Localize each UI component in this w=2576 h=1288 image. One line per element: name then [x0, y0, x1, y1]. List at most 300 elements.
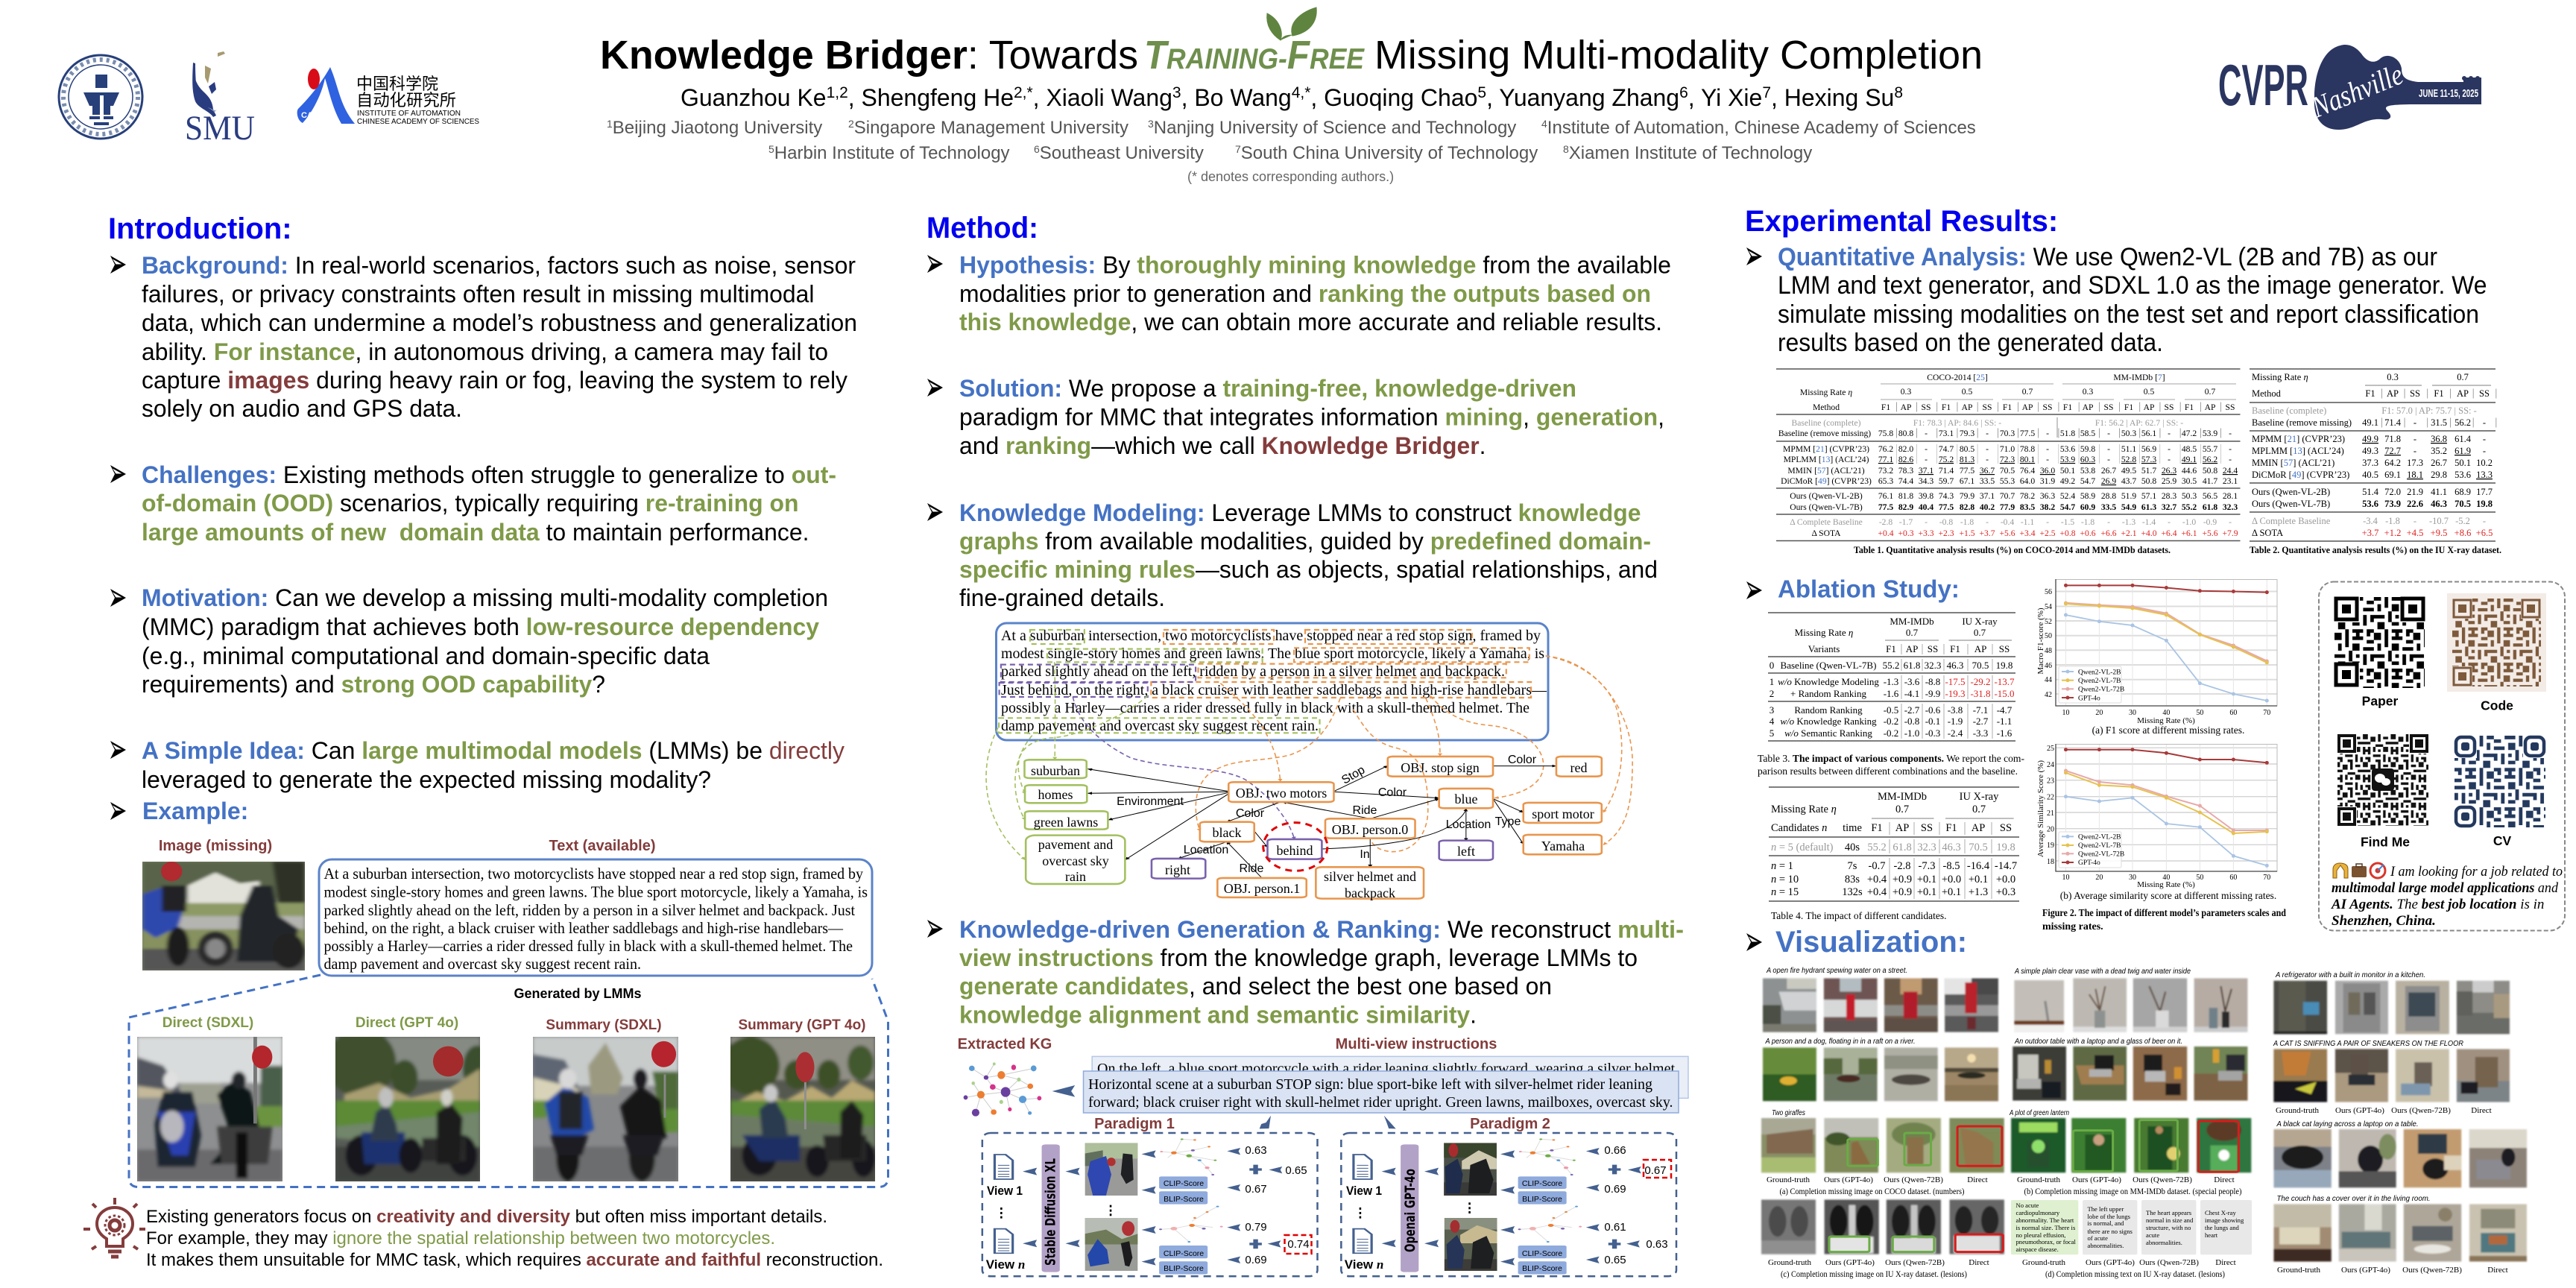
chart legend a: Qwen2-VL-2B	[2078, 669, 2121, 677]
table 4: -14.7	[1995, 860, 2017, 872]
table 1: Ours (Qwen-VL-7B)	[1790, 502, 1863, 512]
table 3: AP	[1906, 643, 1918, 654]
table 2: 56.2	[2455, 417, 2471, 428]
table 1: -	[1925, 444, 1928, 454]
authors: 4,*	[1292, 84, 1310, 101]
generated report text: structure, with no	[2146, 1224, 2191, 1231]
table 1: -0.4	[2001, 517, 2014, 527]
table 1: 57.1	[2141, 491, 2156, 501]
table 1: -	[2107, 444, 2110, 454]
table 3: -2.7	[1904, 704, 1920, 716]
table 2: 50.1	[2455, 458, 2471, 468]
bullet: Challenges	[110, 461, 836, 546]
graph node labels: pavement and	[1038, 837, 1113, 852]
job note: Shenzhen, China.	[2332, 913, 2436, 929]
chart: similarity score: 19	[2047, 842, 2054, 850]
table 2: 51.4	[2362, 487, 2379, 497]
visualization column labels: Ours (GPT-4o)	[2335, 1106, 2384, 1115]
table 1: AP	[1962, 402, 1972, 412]
table 1: 40.4	[1919, 502, 1933, 512]
table 1: 26.9	[2101, 476, 2116, 486]
table 1: MPMM [21] (CVPR’23)	[1783, 444, 1869, 454]
logo: CVPR Nashville: Nashville	[2306, 57, 2408, 124]
affiliations: 8	[1563, 143, 1569, 155]
visualization prompts	[1765, 967, 2463, 1203]
arrow: KG to instructions	[1052, 1085, 1075, 1097]
table 1: 49.1	[2182, 455, 2197, 464]
table 2: 37.3	[2362, 458, 2378, 468]
authors: 7	[1762, 84, 1771, 101]
graph node labels: OBJ. person.0	[1332, 822, 1408, 837]
table 1: 30.5	[2182, 476, 2197, 486]
table 1: 0.5	[1962, 387, 1972, 397]
table 1: MMIN [57] (ACL’21)	[1787, 466, 1865, 476]
bullet: Knowledge Modeling: fine-grained details.	[959, 584, 1165, 611]
logo: CASIA: 中国科学院	[356, 71, 438, 95]
bullet: Motivation	[110, 584, 828, 698]
visualization column labels: Ground-truth	[2017, 1175, 2061, 1184]
heading: Introduction: Introduction:	[108, 212, 292, 245]
bullet: A Simple Idea: leveraged to generate the expected missing modality?	[142, 766, 711, 793]
chart legend b: Qwen2-VL-72B	[2078, 851, 2124, 859]
table 1: 71.4	[1939, 466, 1954, 476]
chart: similarity score: 22	[2047, 793, 2054, 802]
bullet: Background: Background: In real-world scenarios, factors such as noise, sensor	[142, 252, 856, 279]
takeaway text: It makes them unsuitable for MMC task, which requires accurate and faithful reconstruction.	[146, 1250, 883, 1270]
table 3: Variants	[1808, 643, 1840, 654]
table 4: n = 10	[1771, 874, 1799, 886]
table 3: 0.7	[1906, 627, 1919, 638]
table 4	[1769, 787, 2019, 921]
table 1: +6.1	[2181, 528, 2197, 538]
affiliations: Nanjing University of Science and Technology	[1154, 118, 1516, 138]
graph edge labels	[1117, 754, 1537, 875]
title: Knowledge Bridger: Towards	[600, 34, 1138, 78]
callout: source text	[319, 859, 872, 976]
generated report text: Chest X-ray	[2205, 1209, 2236, 1216]
paradigm labels and scores: CLIP-Score	[1164, 1179, 1204, 1188]
table 1: 44.6	[2182, 466, 2197, 476]
authors: Guanzhou Ke	[681, 84, 827, 111]
affiliations: 3	[1148, 118, 1154, 130]
bullet: A Simple Idea	[110, 737, 845, 793]
table 4: AP	[1895, 822, 1909, 834]
table 3: -8.8	[1925, 676, 1940, 687]
table 1: 56.1	[2141, 429, 2156, 438]
chart: F1 score: Missing Rate (%)	[2137, 716, 2195, 725]
table 2: -	[2483, 446, 2486, 456]
table 1: 80.5	[1960, 444, 1974, 454]
table 1: 34.3	[1919, 476, 1933, 486]
table 2: 13.3	[2476, 470, 2493, 480]
table 1: F1: 56.2 | AP: 62.7 | SS: -	[2095, 418, 2183, 428]
chart legend b: Qwen2-VL-2B	[2078, 833, 2121, 841]
bullet: Challenges: of-domain (OOD) scenarios, typically requiring re-training on	[142, 490, 799, 517]
table 1: AP	[2205, 402, 2215, 412]
table 1: 72.3	[2000, 455, 2015, 464]
table 1: 78.3	[1898, 466, 1913, 476]
generated report text: cardiopulmonary	[2015, 1209, 2060, 1216]
chart: F1 score: 60	[2229, 709, 2237, 717]
pipeline shapes and images	[964, 1056, 1688, 1117]
paradigm generated images	[1085, 1143, 1497, 1271]
authors: , Yuanyang Zhang	[1486, 84, 1679, 111]
table 1: 77.5	[1878, 502, 1893, 512]
graph node labels: blue	[1455, 792, 1478, 806]
table 2: 26.7	[2431, 458, 2447, 468]
paradigm labels and scores: BLIP-Score	[1164, 1195, 1204, 1204]
bullet: Knowledge Modeling: Knowledge Modeling: Leverage LMMs to construct knowledge	[959, 499, 1641, 526]
table 1: -	[2229, 455, 2232, 464]
table 2: 71.4	[2384, 417, 2402, 428]
table 2	[2250, 369, 2501, 555]
table 2: -10.7	[2429, 516, 2449, 526]
table 1: AP	[2022, 402, 2033, 412]
chart: similarity score: 25	[2047, 745, 2054, 753]
table 2: 64.2	[2384, 458, 2401, 468]
table 2: 36.8	[2431, 434, 2447, 444]
table 3: 61.8	[1904, 660, 1920, 671]
visualization column labels: Direct	[2471, 1106, 2492, 1115]
bullet: Hypothesis: Hypothesis: By thoroughly mining knowledge from the available	[959, 252, 1671, 279]
chart: similarity score: Missing Rate (%)	[2137, 880, 2195, 889]
table 4: time	[1843, 822, 1862, 834]
table 4: -2.8	[1894, 860, 1910, 872]
table 1: 81.3	[1960, 455, 1974, 464]
table 3: AP	[1974, 643, 1986, 654]
bullet: Motivation: (e.g., minimal computational and domain-specific data	[142, 643, 710, 669]
generated report text: image showing	[2205, 1216, 2244, 1224]
table 1: -	[2229, 444, 2232, 454]
table 3: -0.2	[1884, 716, 1898, 727]
table 4: 7s	[1848, 860, 1857, 872]
table 1: 37.1	[1919, 466, 1933, 476]
bullet: Knowledge Modeling: specific mining rules—such as objects, spatial relationships, and	[959, 556, 1658, 583]
table 2: 19.8	[2476, 499, 2493, 509]
chart: F1 score: 42	[2045, 691, 2052, 699]
bullet: Knowledge-driven Generation and Ranking: view instructions from the knowledge graph, leverage LMMs to	[959, 944, 1638, 971]
table 3: 0.7	[1974, 627, 1986, 638]
bullet: Motivation: requirements) and strong OOD capability?	[142, 671, 605, 698]
generated report text: abnormality. The heart	[2015, 1216, 2074, 1224]
table 1: 60.9	[2080, 502, 2095, 512]
header	[59, 7, 2481, 184]
table 1: 43.7	[2121, 476, 2136, 486]
graph node labels: behind	[1276, 843, 1313, 858]
visualization column labels: Ours (GPT-4o)	[2072, 1175, 2121, 1184]
affiliations: Southeast University	[1040, 143, 1204, 163]
table 2: Δ Complete Baseline	[2252, 516, 2331, 526]
generated report text: of acute	[2087, 1234, 2108, 1242]
table 4: +0.1	[1969, 874, 1988, 886]
table 1: SS	[2043, 402, 2052, 412]
table 4: n = 5 (default)	[1771, 842, 1834, 853]
table 4: +0.4	[1867, 886, 1887, 898]
table 1: 28.1	[2223, 491, 2238, 501]
table 2: MMIN [57] (ACL’21)	[2252, 458, 2334, 468]
authors: 5	[1477, 84, 1486, 101]
table 2: 72.0	[2384, 487, 2401, 497]
table 3: -1.6	[1997, 727, 2012, 739]
table 2: -	[2414, 516, 2416, 526]
front instruction box	[1084, 1071, 1679, 1113]
graph edge labels: Color	[1378, 786, 1407, 799]
arrows to paradigms	[1260, 1116, 1396, 1128]
graph edge labels: In	[1360, 848, 1370, 861]
table 3: 70.5	[1972, 660, 1989, 671]
table 1: 26.7	[2101, 466, 2116, 476]
table 1: 83.5	[2020, 502, 2035, 512]
visualization column labels: Direct	[2487, 1266, 2508, 1275]
table 2: 49.3	[2362, 446, 2378, 456]
table 1: 40.2	[1980, 502, 1995, 512]
table 2: 53.6	[2362, 499, 2378, 509]
table 2: 0.3	[2387, 372, 2399, 382]
visualization column labels: Ground-truth	[2022, 1258, 2066, 1267]
table 2: Missing Rate η	[2252, 372, 2308, 382]
table 2: -3.4	[2363, 516, 2378, 526]
table 1: F1	[1881, 402, 1890, 412]
QR code: paper	[2334, 597, 2425, 688]
label: Code: Code	[2481, 698, 2513, 713]
chart legend b: GPT-4o	[2078, 859, 2100, 867]
chart: F1 score: 54	[2045, 603, 2052, 611]
table 3: -0.3	[1925, 727, 1940, 739]
table 1: F1	[2185, 402, 2194, 412]
table 3: -17.5	[1945, 676, 1966, 687]
table 2: Ours (Qwen-VL-7B)	[2252, 499, 2330, 509]
table 2: Ours (Qwen-VL-2B)	[2252, 487, 2330, 497]
chart: F1 score: 40	[2162, 709, 2170, 717]
visualization column labels: Ground-truth	[2276, 1106, 2320, 1115]
label: summary SDXL: Summary (SDXL)	[546, 1017, 662, 1033]
authors: 8	[1894, 84, 1903, 101]
table 4: 132s	[1842, 886, 1863, 898]
table 1: F1	[1942, 402, 1951, 412]
table 2 caption: Table 2. Quantitative analysis results (%) on the IU X-ray dataset.	[2250, 545, 2501, 555]
table 1: -1.3	[2122, 517, 2135, 527]
row: fridge	[2273, 981, 2510, 1034]
source text box: Just behind, on the right, a black cruiser with leather saddlebags and high-rise handlebars—	[1001, 682, 1547, 698]
bullet: Hypothesis: modalities prior to generation and ranking the outputs based on	[959, 280, 1651, 307]
table 1: 28.8	[2101, 491, 2116, 501]
panel: method	[926, 212, 1688, 1276]
heading: Method: Method:	[926, 212, 1038, 244]
bullet: Quantitative Analysis: simulate missing modalities on the test set and report classification	[1778, 300, 2479, 329]
authors: 6	[1679, 84, 1688, 101]
table 3: -4.1	[1904, 688, 1919, 699]
table 2: 35.2	[2431, 446, 2447, 456]
table 4: 83s	[1845, 874, 1860, 886]
visualization column labels: Ours (GPT-4o)	[1825, 1258, 1875, 1267]
score boxes	[1159, 1176, 1208, 1275]
table 1: SS	[1922, 402, 1931, 412]
table 2: SS	[2410, 388, 2420, 399]
table 2: 68.9	[2455, 487, 2471, 497]
visualization column labels: Ours (Qwen-72B)	[1885, 1258, 1945, 1267]
table 1: AP	[1901, 402, 1911, 412]
table 2: 41.1	[2431, 487, 2447, 497]
table 4: AP	[1972, 822, 1985, 834]
table 1: 33.5	[2101, 502, 2116, 512]
table 1: -1.0	[2182, 517, 2196, 527]
affiliations: Singapore Management University	[854, 118, 1128, 138]
graph node labels: green lawns	[1034, 815, 1098, 830]
row: sneakers cat	[2273, 1049, 2510, 1102]
table 1: 74.3	[1939, 491, 1954, 501]
table 3: -2.4	[1948, 727, 1963, 739]
table 1: 59.7	[1939, 476, 1954, 486]
table 1: 50.1	[2060, 466, 2075, 476]
table 3: Random Ranking	[1794, 704, 1863, 716]
bullet: Knowledge-driven Generation and Ranking: generate candidates, and select the best one based on	[959, 973, 1552, 1000]
mini graphs	[1159, 1138, 1223, 1243]
table 1: 82.9	[1898, 502, 1913, 512]
table 1: 79.3	[1960, 429, 1974, 438]
table 3 caption	[1758, 753, 2025, 777]
generated report text: acute	[2146, 1231, 2159, 1239]
visualization column labels: Ours (Qwen-72B)	[2402, 1266, 2462, 1275]
logo: Singapore Management University	[185, 51, 255, 148]
table 2: 49.9	[2362, 434, 2378, 444]
table 1: 76.4	[2020, 466, 2035, 476]
authors: , Bo Wang	[1181, 84, 1292, 111]
table 1: 33.5	[1980, 476, 1995, 486]
table 1: 49.2	[2060, 476, 2075, 486]
generated report text: there are no signs	[2087, 1228, 2133, 1235]
bullet: Knowledge-driven Generation and Ranking	[927, 916, 1684, 1029]
generated report text: no pleural effusion,	[2015, 1231, 2065, 1239]
table 2: +6.5	[2476, 528, 2493, 538]
table 1: 26.3	[2162, 466, 2176, 476]
table 2: MPLMM [13] (ACL’24)	[2252, 446, 2344, 456]
table 3: -1.6	[1884, 688, 1899, 699]
paradigm labels and scores: BLIP-Score	[1522, 1195, 1562, 1204]
graph edge labels: Environment	[1117, 795, 1184, 808]
icon: light bulb	[83, 1198, 145, 1257]
authors: 3	[1172, 84, 1181, 101]
table 3: 46.3	[1947, 660, 1963, 671]
image: summary SDXL	[533, 1037, 678, 1181]
table 1: 51.9	[2121, 491, 2136, 501]
table 3: 0	[1770, 660, 1774, 671]
chart: F1 score: 10	[2062, 709, 2069, 717]
bullet: Background: data, which can undermine a model’s robustness and generalization	[142, 309, 857, 336]
visualization column labels: Ours (Qwen-72B)	[1884, 1175, 1943, 1184]
table 1: -	[2229, 429, 2232, 438]
bullet: Background: solely on audio and GPS data.	[142, 395, 462, 422]
bullet: Quantitative Analysis: Quantitative Analysis: We use Qwen2-VL (2B and 7B) as our	[1778, 243, 2437, 271]
graph node labels	[1031, 760, 1594, 900]
row: x-ray	[1761, 1199, 2004, 1254]
authors: , Shengfeng He	[848, 84, 1014, 111]
row: laptop	[2012, 1046, 2247, 1101]
generated report text: is normal, and	[2087, 1219, 2124, 1227]
bullet: Background: capture images during heavy rain or fog, leaving the system to rely	[142, 367, 847, 394]
table 2: -	[2414, 434, 2416, 444]
table 1: 53.9	[2060, 455, 2075, 464]
paradigm labels and scores: 0.65	[1285, 1164, 1307, 1177]
table 2: 18.1	[2407, 470, 2423, 480]
bullet: Solution: and ranking—which we call Knowledge Bridger.	[959, 432, 1486, 459]
table 1: 55.7	[2203, 444, 2217, 454]
label: Paradigm 2: Paradigm 2	[1470, 1116, 1550, 1132]
table 1: 24.4	[2223, 466, 2238, 476]
logo: CASIA: INSTITUTE OF AUTOMATION	[357, 110, 461, 118]
figure 2 caption	[2042, 908, 2286, 932]
visualization column labels: Direct	[1967, 1175, 1988, 1184]
table 1: -	[1925, 517, 1928, 527]
table 1: 80.1	[2020, 455, 2035, 464]
table 3: SS	[1928, 643, 1938, 654]
table 2: 0.7	[2457, 372, 2469, 382]
chart: similarity score: 21	[2047, 809, 2054, 818]
table 3: 2	[1770, 688, 1774, 699]
table 2: 71.8	[2384, 434, 2401, 444]
table 1 caption: Table 1. Quantitative analysis results (%) on COCO-2014 and MM-IMDb datasets.	[1854, 545, 2171, 555]
table 4: +0.9	[1892, 874, 1912, 886]
table 4: Missing Rate η	[1771, 804, 1837, 815]
bullet: Ablation Study: Ablation Study:	[1778, 575, 1960, 602]
table 4: 32.3	[1917, 842, 1936, 853]
table 3: 5	[1770, 727, 1774, 739]
table 1: MPLMM [13] (ACL’24)	[1784, 455, 1869, 464]
table 1: Baseline (complete)	[1791, 418, 1861, 428]
table 1: -	[1925, 455, 1928, 464]
table 4: +0.4	[1867, 874, 1887, 886]
table 3: -7.1	[1973, 704, 1988, 716]
table 2: Δ SOTA	[2252, 528, 2283, 538]
table 1	[1776, 369, 2241, 555]
back instruction text: On the left, a blue sport motorcycle with a rider leaning slightly forward, wearing a silver helmet	[1097, 1061, 1675, 1077]
chart: similarity score: 70	[2263, 874, 2270, 882]
back instruction box	[1092, 1056, 1688, 1098]
paradigm labels and scores: 0.65	[1604, 1254, 1626, 1266]
bullet: Knowledge Modeling	[927, 499, 1658, 611]
generated report text: airspace disease.	[2015, 1246, 2059, 1253]
table 2: DiCMoR [49] (CVPR’23)	[2252, 470, 2349, 480]
table 3: 1	[1770, 676, 1774, 687]
table 1: COCO-2014 [25]	[1927, 373, 1988, 382]
table 1: 74.7	[1939, 444, 1954, 454]
table 2: 29.8	[2431, 470, 2447, 480]
title: Missing Multi-modality Completion	[1374, 34, 1983, 78]
table 2: SS	[2479, 388, 2490, 399]
visualization prompts: A CAT IS SNIFFING A PAIR OF SNEAKERS ON THE FLOOR	[2273, 1040, 2463, 1048]
table 3: -1.0	[1904, 727, 1919, 739]
authors: 1,2	[827, 84, 848, 101]
label: text available: Text (available)	[549, 838, 656, 854]
paradigm labels and scores: View 1	[1346, 1184, 1382, 1198]
table 2: 69.1	[2384, 470, 2401, 480]
chart: F1 score: Macro F1-score (%)	[2036, 607, 2045, 675]
bullet: A Simple Idea: A Simple Idea: Can large multimodal models (LMMs) be directly	[142, 737, 845, 764]
table 1: -	[1986, 455, 1989, 464]
table 2: Method	[2252, 388, 2282, 399]
table 2: AP	[2387, 388, 2399, 399]
job note	[2331, 864, 2563, 929]
table 2: -5.2	[2455, 516, 2470, 526]
table 4: F1	[1945, 822, 1957, 834]
table 2: 17.7	[2476, 487, 2493, 497]
affiliations: 1	[607, 118, 613, 130]
table 1: -	[1986, 517, 1989, 527]
visualization captions: (b) Completion missing image on MM-IMDb dataset. (special people)	[2024, 1187, 2242, 1196]
generated report text: the lungs and	[2205, 1224, 2240, 1231]
table 3: SS	[1999, 643, 2010, 654]
graph edge labels: Ride	[1353, 804, 1377, 817]
visualization prompts: An outdoor table with a laptop and a glass of beer on it.	[2014, 1038, 2182, 1046]
